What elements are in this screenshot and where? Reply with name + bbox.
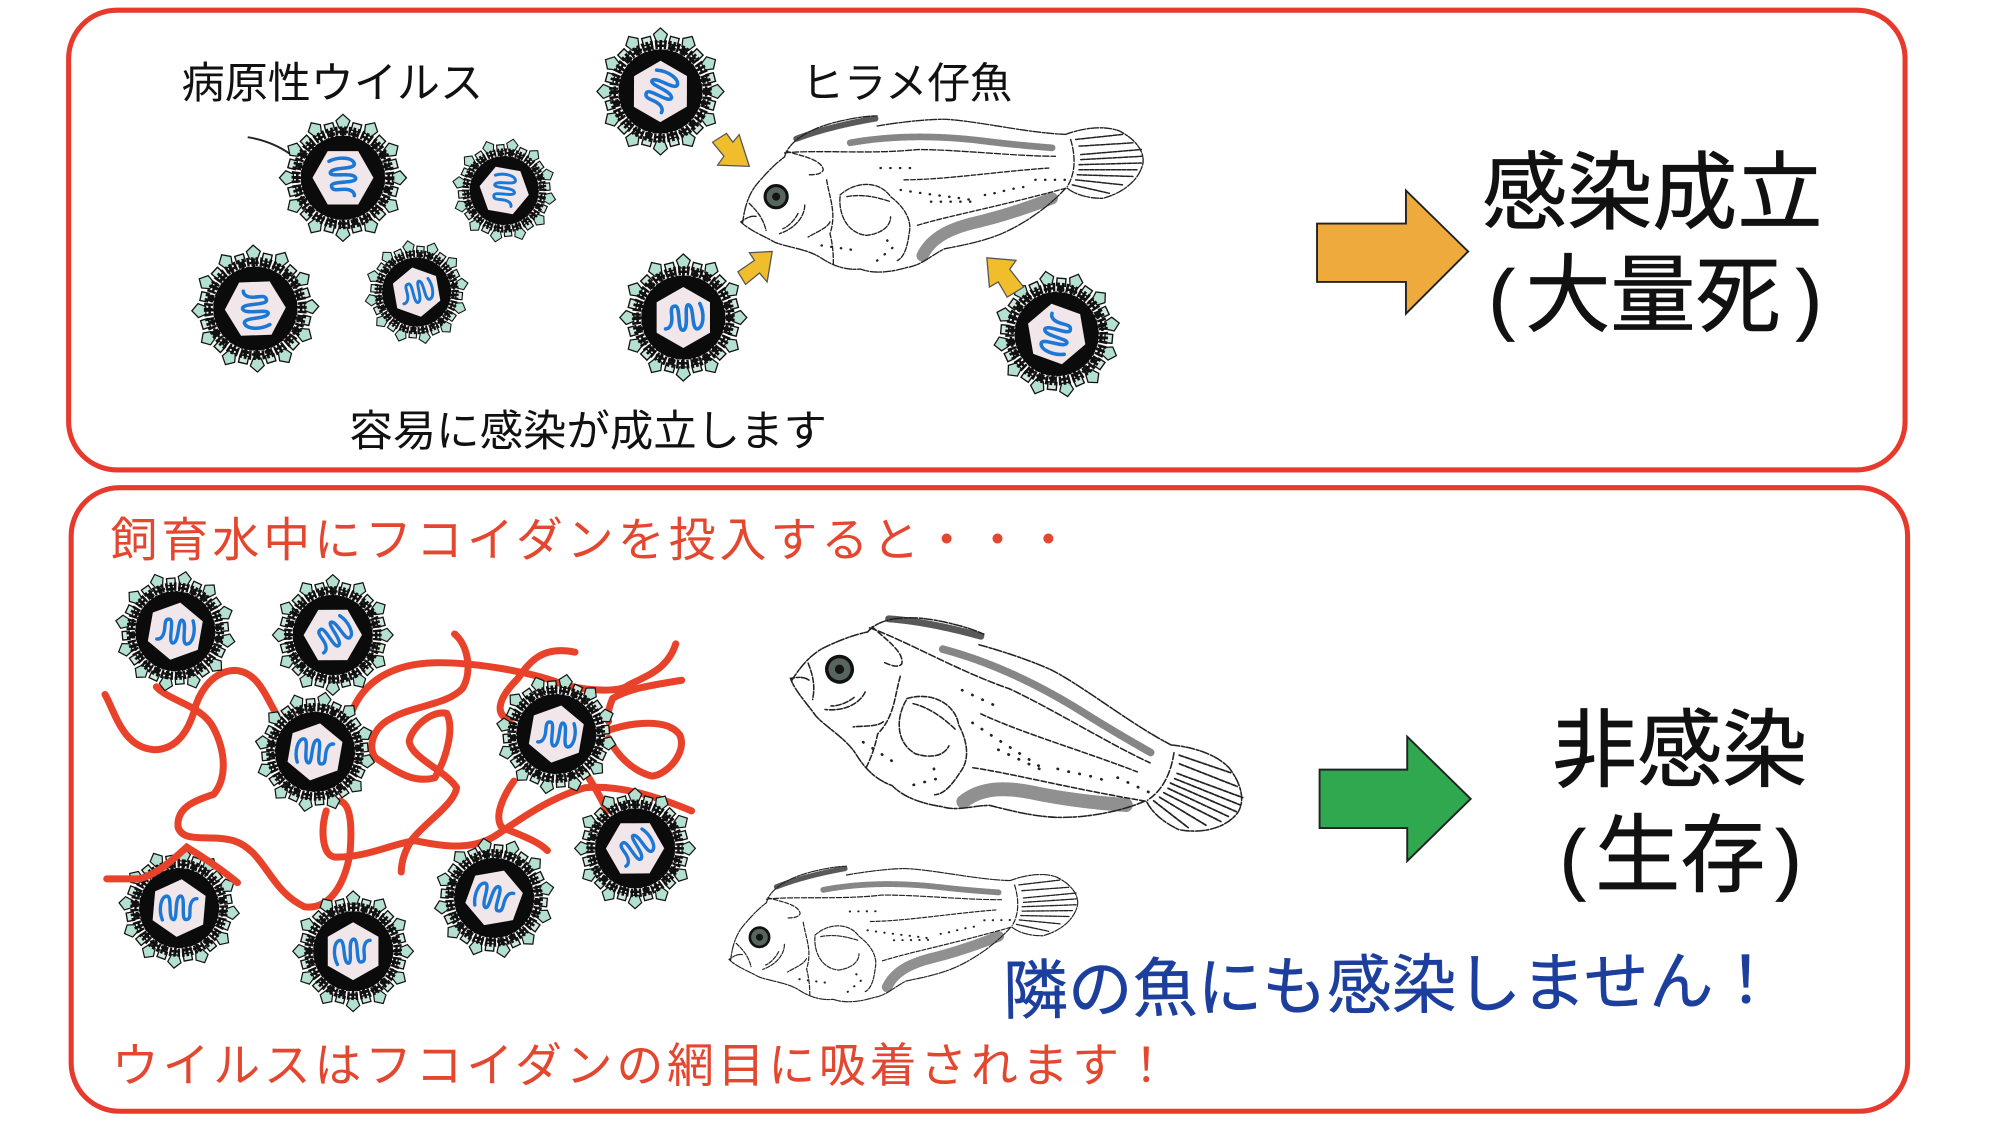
result: mass mortality: ) bbox=[1796, 254, 1822, 342]
virus bbox=[417, 821, 571, 975]
panel: infection without fucoidan bbox=[69, 5, 1905, 470]
small healthy flounder bbox=[728, 864, 1079, 1003]
virus bbox=[250, 553, 415, 717]
virus: right attacker bbox=[975, 253, 1138, 415]
orange arrow bbox=[1317, 191, 1468, 314]
pointer line bbox=[248, 137, 290, 154]
large healthy flounder bbox=[766, 568, 1261, 926]
virus bbox=[486, 664, 626, 804]
strand over lower-left virus bbox=[107, 847, 238, 883]
result: survival: ) bbox=[1776, 814, 1802, 902]
result: mass mortality: ( bbox=[1488, 254, 1515, 342]
caption: infection is easily established: 容易に感染が成立します bbox=[349, 408, 827, 456]
virus bbox=[293, 891, 413, 1012]
caption: viruses adsorbed by fucoidan mesh: ウイルスはフコイダンの網目に吸着されます！ bbox=[112, 1039, 1170, 1092]
fucoidan strands bbox=[105, 634, 692, 907]
virus bbox=[553, 766, 717, 931]
green arrow bbox=[1320, 737, 1471, 861]
label: pathogenic virus: 病原性ウイルス bbox=[182, 60, 483, 108]
result: infection established: 感染成立 bbox=[1482, 146, 1822, 241]
virus bbox=[245, 682, 385, 822]
virus: upper attacker bbox=[574, 5, 747, 178]
yellow arrow: right bbox=[987, 258, 1024, 297]
flounder fry bbox=[741, 116, 1143, 272]
yellow arrow: upper bbox=[713, 133, 749, 166]
heading: adding fucoidan to water: 飼育水中にフコイダンを投入すると・・・ bbox=[111, 513, 1072, 566]
yellow arrow: lower bbox=[738, 251, 772, 284]
virus bbox=[190, 243, 321, 374]
panel border bbox=[71, 488, 1908, 1111]
panel: with fucoidan bbox=[71, 488, 1908, 1111]
result: survival: 生存 bbox=[1595, 809, 1765, 904]
callout: neighbouring fish not infected: 隣の魚にも感染しません！ bbox=[1003, 944, 1779, 1027]
adsorbed viruses bbox=[105, 553, 717, 1012]
result: not infected: 非感染 bbox=[1552, 704, 1807, 799]
result: mass mortality: 大量死 bbox=[1525, 249, 1781, 344]
virus bbox=[356, 232, 477, 352]
virus group: four free viruses bbox=[190, 114, 565, 374]
virus bbox=[114, 843, 244, 973]
virus bbox=[279, 114, 406, 241]
result: survival: ( bbox=[1560, 814, 1586, 902]
label: flounder fry: ヒラメ仔魚 bbox=[801, 60, 1012, 107]
virus: lower attacker bbox=[620, 254, 747, 381]
panel border bbox=[69, 10, 1905, 470]
virus bbox=[444, 130, 565, 251]
virus bbox=[105, 561, 245, 701]
